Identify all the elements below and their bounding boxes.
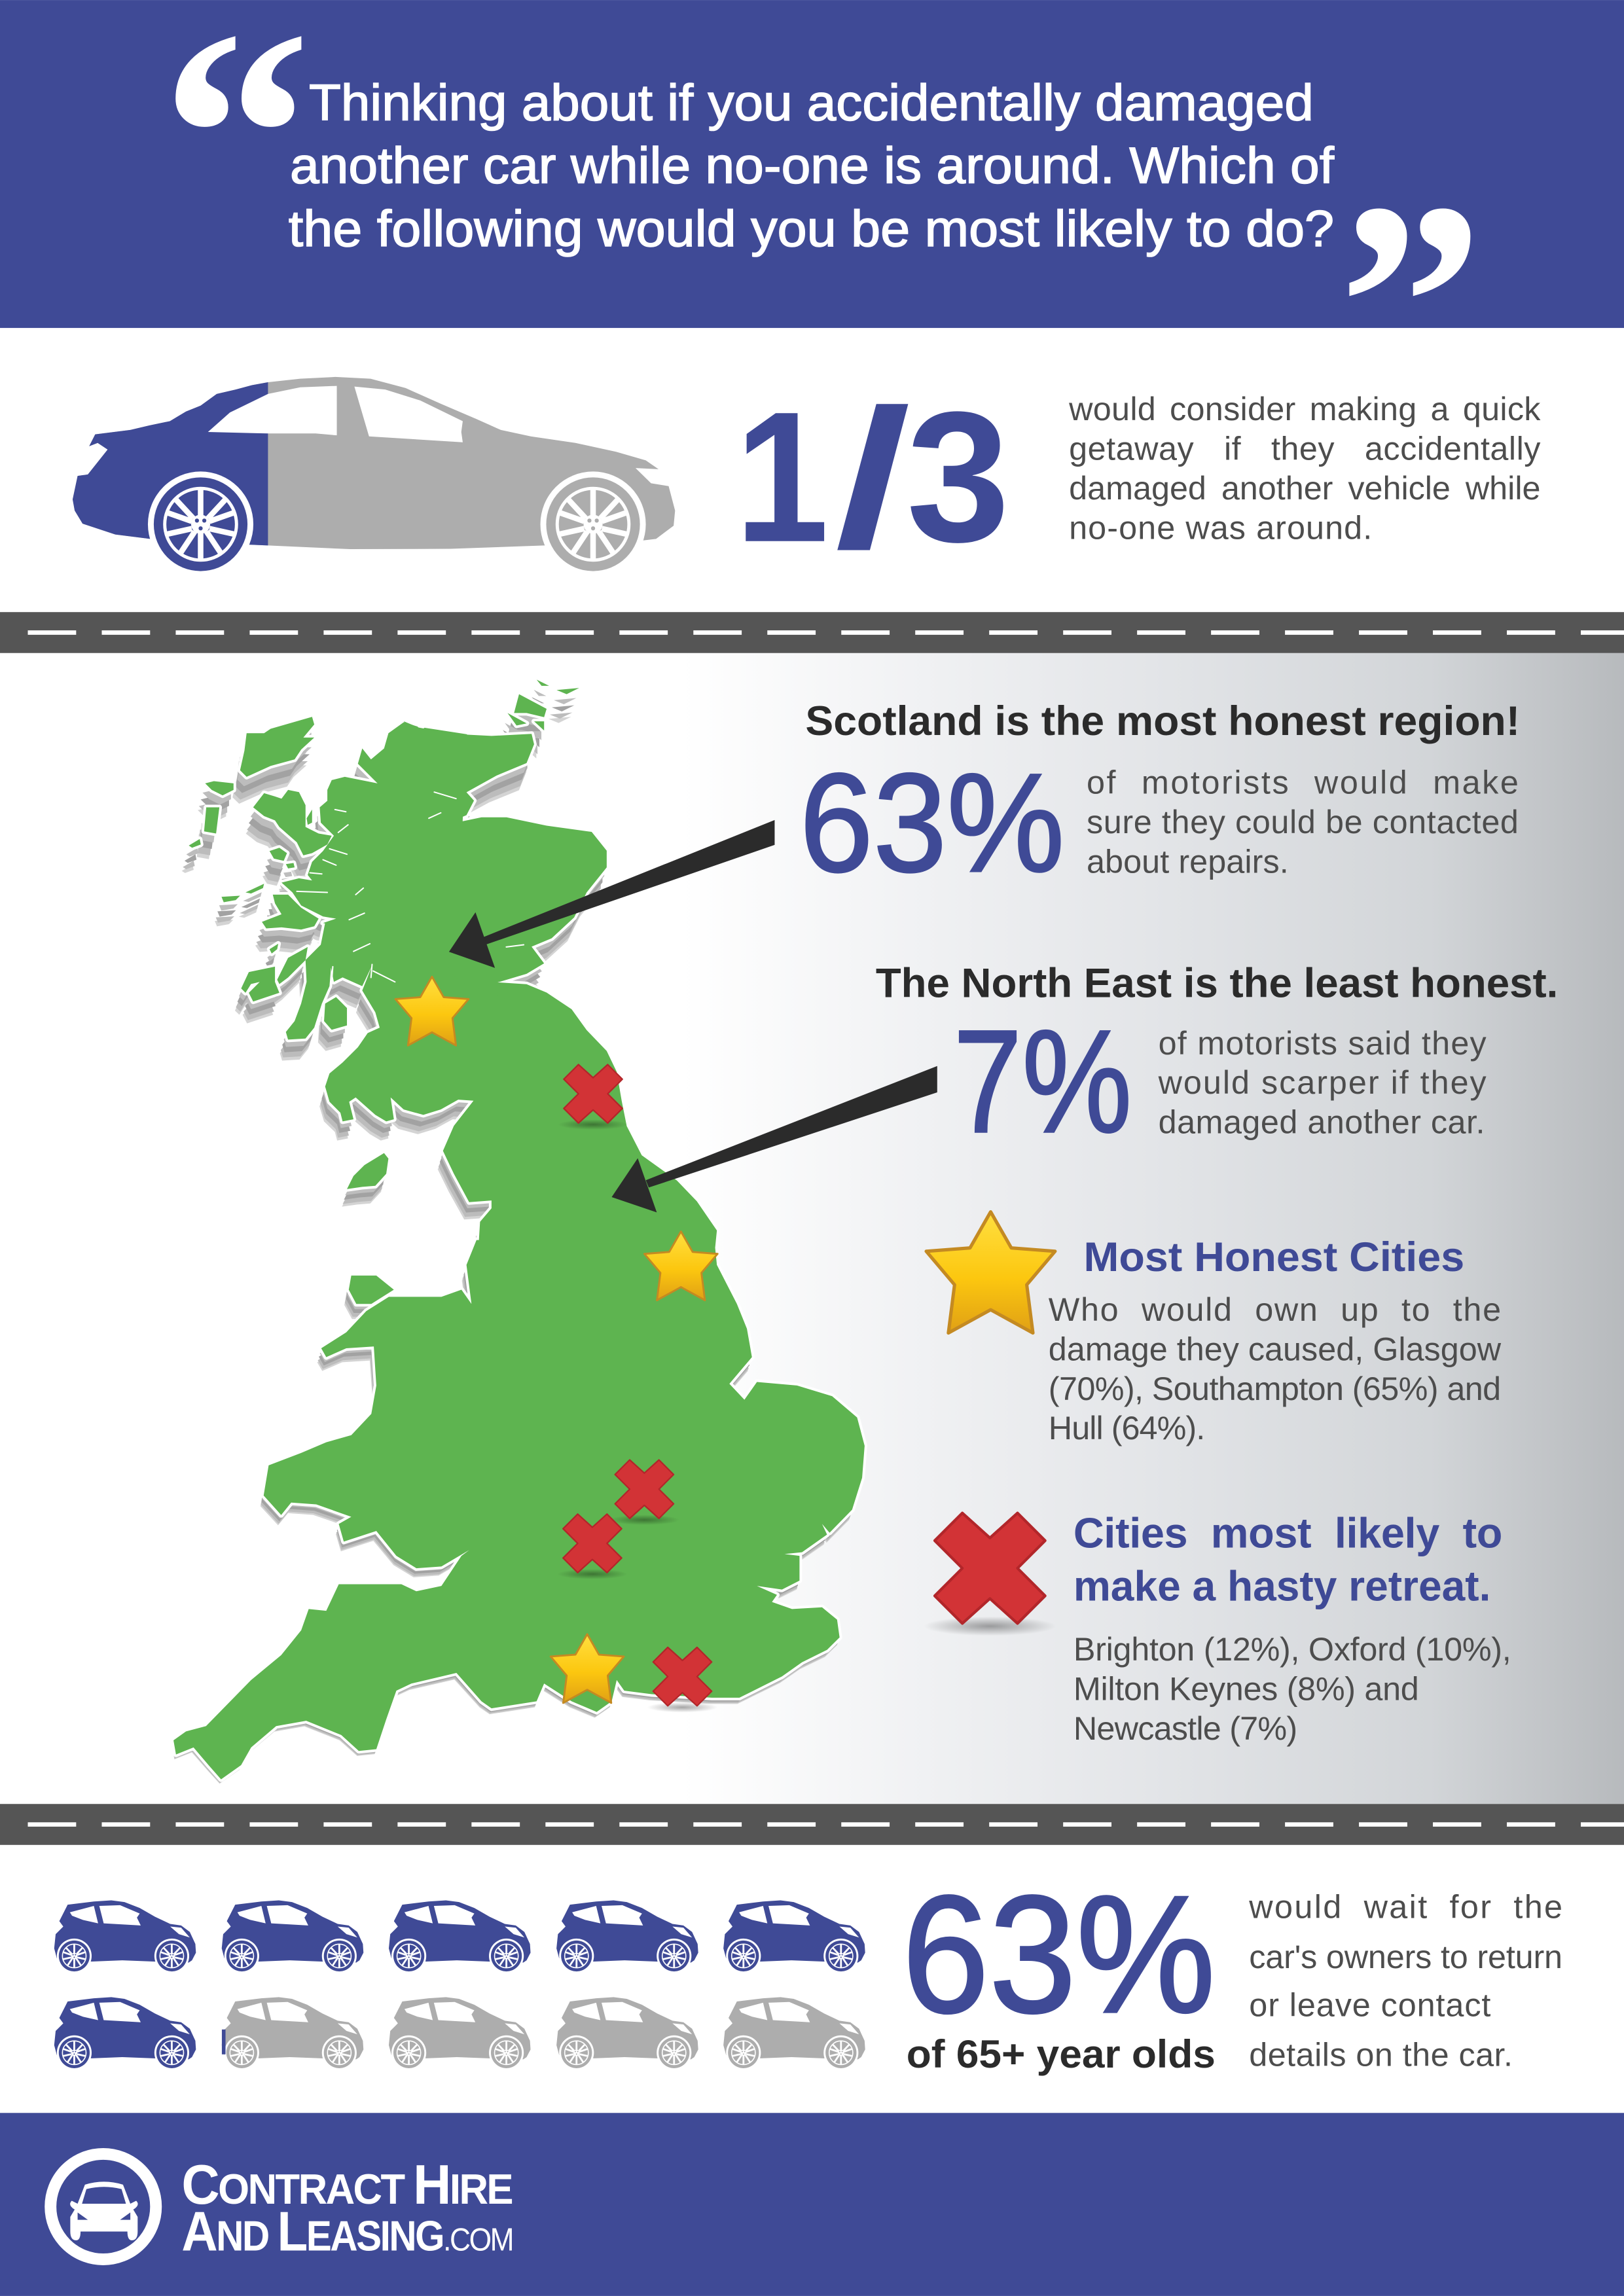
text: most honest cities list: damage they caused, Glasgow: [1049, 1330, 1502, 1367]
text: getaway description: damaged another vehicle while: [1069, 469, 1540, 507]
icon: large star: [926, 1212, 1055, 1333]
text: getaway description: getaway if they accidentally: [1069, 430, 1541, 467]
road divider bottom: [0, 1804, 1624, 1845]
text: getaway description: [1068, 390, 1541, 546]
heading: cities most likely: [1074, 1509, 1502, 1609]
heading: most honest cities: Most Honest Cities: [1083, 1234, 1464, 1280]
logo: car in circle: [50, 2154, 156, 2259]
big stat: 1/3: 1: [735, 374, 829, 581]
icon: car one third blue: [73, 377, 675, 577]
logo: wordmark: [181, 2153, 513, 2263]
logo: wordmark: CONTRACT HIRE: [181, 2153, 512, 2215]
big stat: 7%: 7%: [953, 999, 1132, 1163]
text: hasty retreat cities list: Milton Keynes (8%) and: [1074, 1670, 1419, 1707]
panel: footer: [0, 2113, 1624, 2296]
title: survey question: [289, 74, 1334, 257]
text: wait for owners: car's owners to return: [1249, 1938, 1562, 1975]
lochs and inlets: [297, 792, 524, 982]
big stat: 1/3: 3: [907, 374, 1010, 581]
text: Scotland description: about repairs.: [1087, 842, 1289, 880]
text: wait for owners: details on the car.: [1249, 2036, 1513, 2073]
text: wait for owners: would wait for the: [1248, 1888, 1562, 1926]
text: North East description: damaged another car.: [1159, 1103, 1485, 1141]
text: Scotland description: [1087, 764, 1519, 880]
panel: one third stat: [0, 328, 1624, 612]
panel: top banner: [0, 0, 1624, 464]
big stat: 63% Scotland: 63%: [799, 744, 1064, 901]
icon: closing quote mark: ”: [1339, 143, 1483, 464]
icon: large cross: [924, 1513, 1056, 1636]
text: hasty retreat cities list: Newcastle (7%): [1074, 1710, 1297, 1747]
map of Great Britain: [166, 679, 865, 1784]
icon: cross Newcastle: [558, 1064, 628, 1130]
icon: star Hull: [644, 1232, 717, 1300]
heading: cities most likely: Cities most likely to: [1074, 1509, 1502, 1557]
text: wait for owners: or leave contact: [1249, 1986, 1490, 2024]
panel: 65+ stat: [0, 1845, 1624, 2113]
text: most honest cities list: Who would own up to the: [1049, 1291, 1501, 1328]
title: survey question: Thinking about if you accidentally damaged: [309, 74, 1314, 132]
heading: cities most likely: make a hasty retreat.: [1074, 1562, 1490, 1609]
text: hasty retreat cities list: Brighton (12%), Oxford (10%),: [1074, 1630, 1511, 1668]
text: getaway description: no-one was around.: [1069, 509, 1372, 546]
text: Scotland description: sure they could be contacted: [1087, 803, 1519, 840]
icon: star Southampton: [550, 1634, 624, 1703]
icon: cross Milton Keynes: [609, 1460, 679, 1525]
title: survey question: the following would you be most likely to do?: [289, 200, 1334, 257]
text: most honest cities list: Hull (64%).: [1049, 1409, 1205, 1446]
big stat: 1/3: [735, 369, 1010, 588]
logo: wordmark: AND LEASING.COM: [181, 2201, 513, 2263]
big stat: 1/3: /: [835, 369, 912, 588]
text: Scotland description: of motorists would make: [1087, 764, 1519, 801]
text: most honest cities list: (70%), Southampton (65%) and: [1049, 1370, 1501, 1407]
text: getaway description: would consider making a quick: [1068, 390, 1541, 427]
big stat: 63% of 65+: 63%: [902, 1861, 1216, 2048]
heading: North East: The North East is the least honest.: [876, 961, 1558, 1007]
arrow: to Scotland: [449, 820, 774, 968]
text: North East description: of motorists said they: [1159, 1024, 1487, 1062]
label: of 65+ year olds: of 65+ year olds: [907, 2032, 1216, 2076]
text: wait for owners: [1248, 1888, 1562, 2073]
text: North East description: would scarper if they: [1158, 1064, 1487, 1101]
text: North East description: [1158, 1024, 1487, 1141]
icon: cross Brighton: [647, 1647, 717, 1712]
arrow: to North East: [611, 1066, 937, 1212]
icon: star Glasgow: [395, 977, 469, 1045]
text: most honest cities list: [1049, 1291, 1502, 1446]
panel: UK map section: [0, 653, 1624, 1804]
icon grid: ten cars: [54, 1900, 865, 2070]
icon: cross Oxford: [557, 1514, 628, 1579]
title: survey question: another car while no-one is around. Which of: [290, 137, 1334, 194]
road divider top: [0, 612, 1624, 653]
text: hasty retreat cities list: [1074, 1630, 1511, 1747]
heading: Scotland: Scotland is the most honest region!: [805, 698, 1520, 744]
